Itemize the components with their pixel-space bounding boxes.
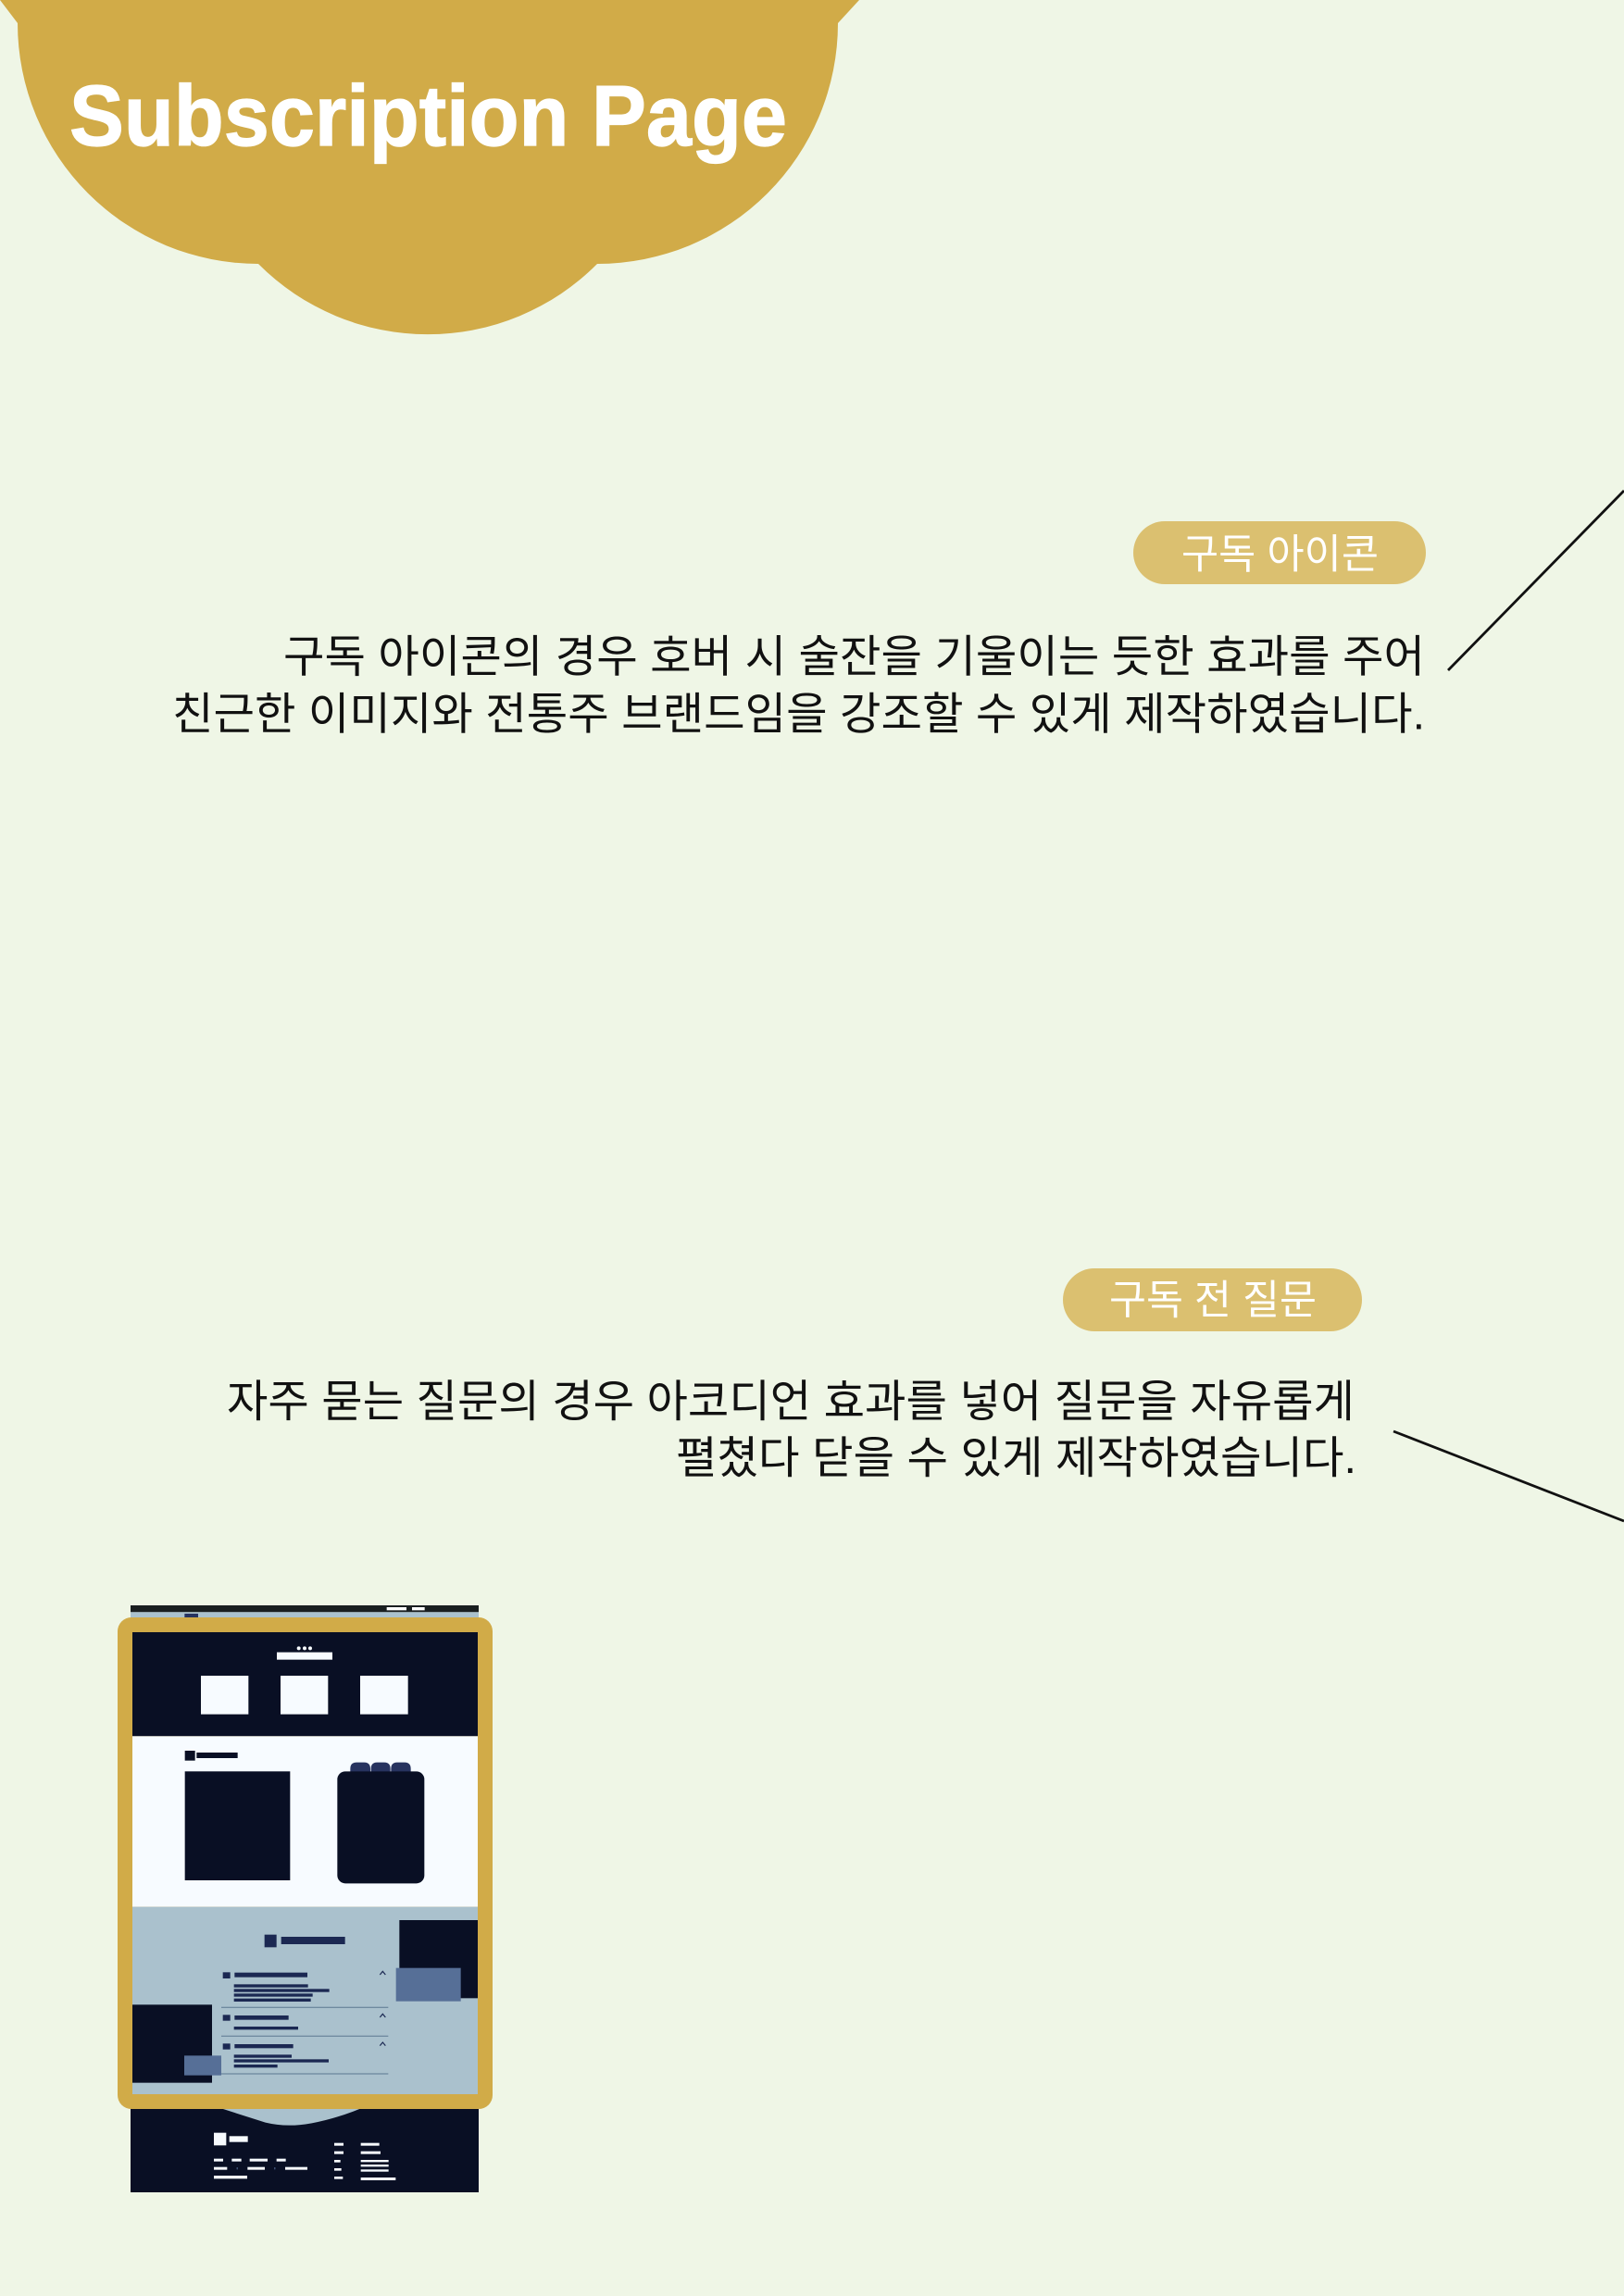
- banner scalloped shape: [0, 0, 859, 334]
- leader line: pre-subscription questions: [1393, 1431, 1624, 1521]
- gold frame: [118, 1617, 493, 2109]
- description: pre-subscription questions: 펼쳤다 닫을 수 있게 제작하였습니다.: [676, 1434, 1356, 1483]
- description: subscription icon: [172, 633, 1425, 739]
- badge: subscription icon: 구독 아이콘: [1181, 531, 1379, 578]
- title banner: [0, 0, 859, 334]
- description: subscription icon: 구독 아이콘의 경우 호버 시 술잔을 기울이는 듯한 효과를 주어: [283, 633, 1425, 681]
- description: pre-subscription questions: [227, 1378, 1356, 1483]
- badge: pre-subscription questions: 구독 전 질문: [1109, 1278, 1317, 1323]
- hero band with three cards: [132, 1632, 478, 1736]
- description: pre-subscription questions: 자주 묻는 질문의 경우 아코디언 효과를 넣어 질문을 자유롭게: [227, 1378, 1355, 1427]
- leader line: subscription icon: [1448, 491, 1624, 670]
- badge: pre-subscription questions: [1063, 1268, 1362, 1331]
- section: subscription icon: [172, 491, 1624, 739]
- white product section: [132, 1736, 478, 1907]
- mockup footer: [131, 2108, 479, 2192]
- description: subscription icon: 친근한 이미지와 전통주 브랜드임을 강조할 수 있게 제작하였습니다.: [172, 691, 1425, 739]
- title: Subscription Page: [69, 68, 787, 164]
- website mockup: [118, 1605, 493, 2192]
- mockup top navigation: [131, 1605, 479, 1618]
- badge: subscription icon: [1133, 521, 1426, 584]
- FAQ accordion section: [132, 1907, 478, 2094]
- section: pre-subscription questions: [227, 1268, 1624, 1521]
